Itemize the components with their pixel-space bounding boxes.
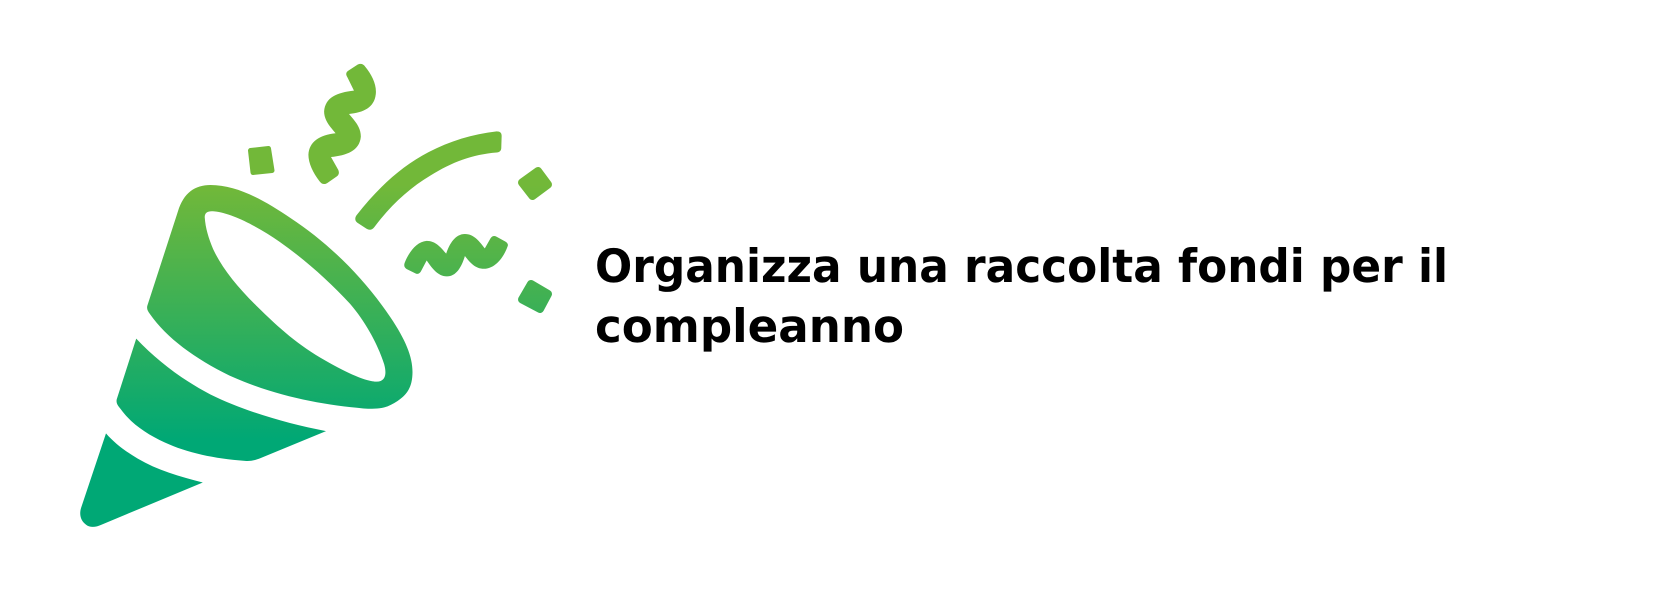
confetti squiggle top	[308, 64, 376, 184]
confetti streamer arc	[355, 131, 502, 230]
title	[595, 239, 1448, 353]
title: compleanno	[595, 299, 904, 353]
popper cone body with opening	[147, 185, 412, 409]
icon: party popper with confetti	[80, 64, 548, 527]
confetti squiggle right	[404, 234, 508, 276]
confetti square top left	[250, 148, 272, 172]
popper tip	[80, 433, 203, 527]
popper middle band	[117, 339, 326, 461]
confetti square right upper	[522, 171, 548, 196]
confetti square right lower	[522, 284, 548, 309]
title: Organizza una raccolta fondi per il	[595, 239, 1448, 293]
